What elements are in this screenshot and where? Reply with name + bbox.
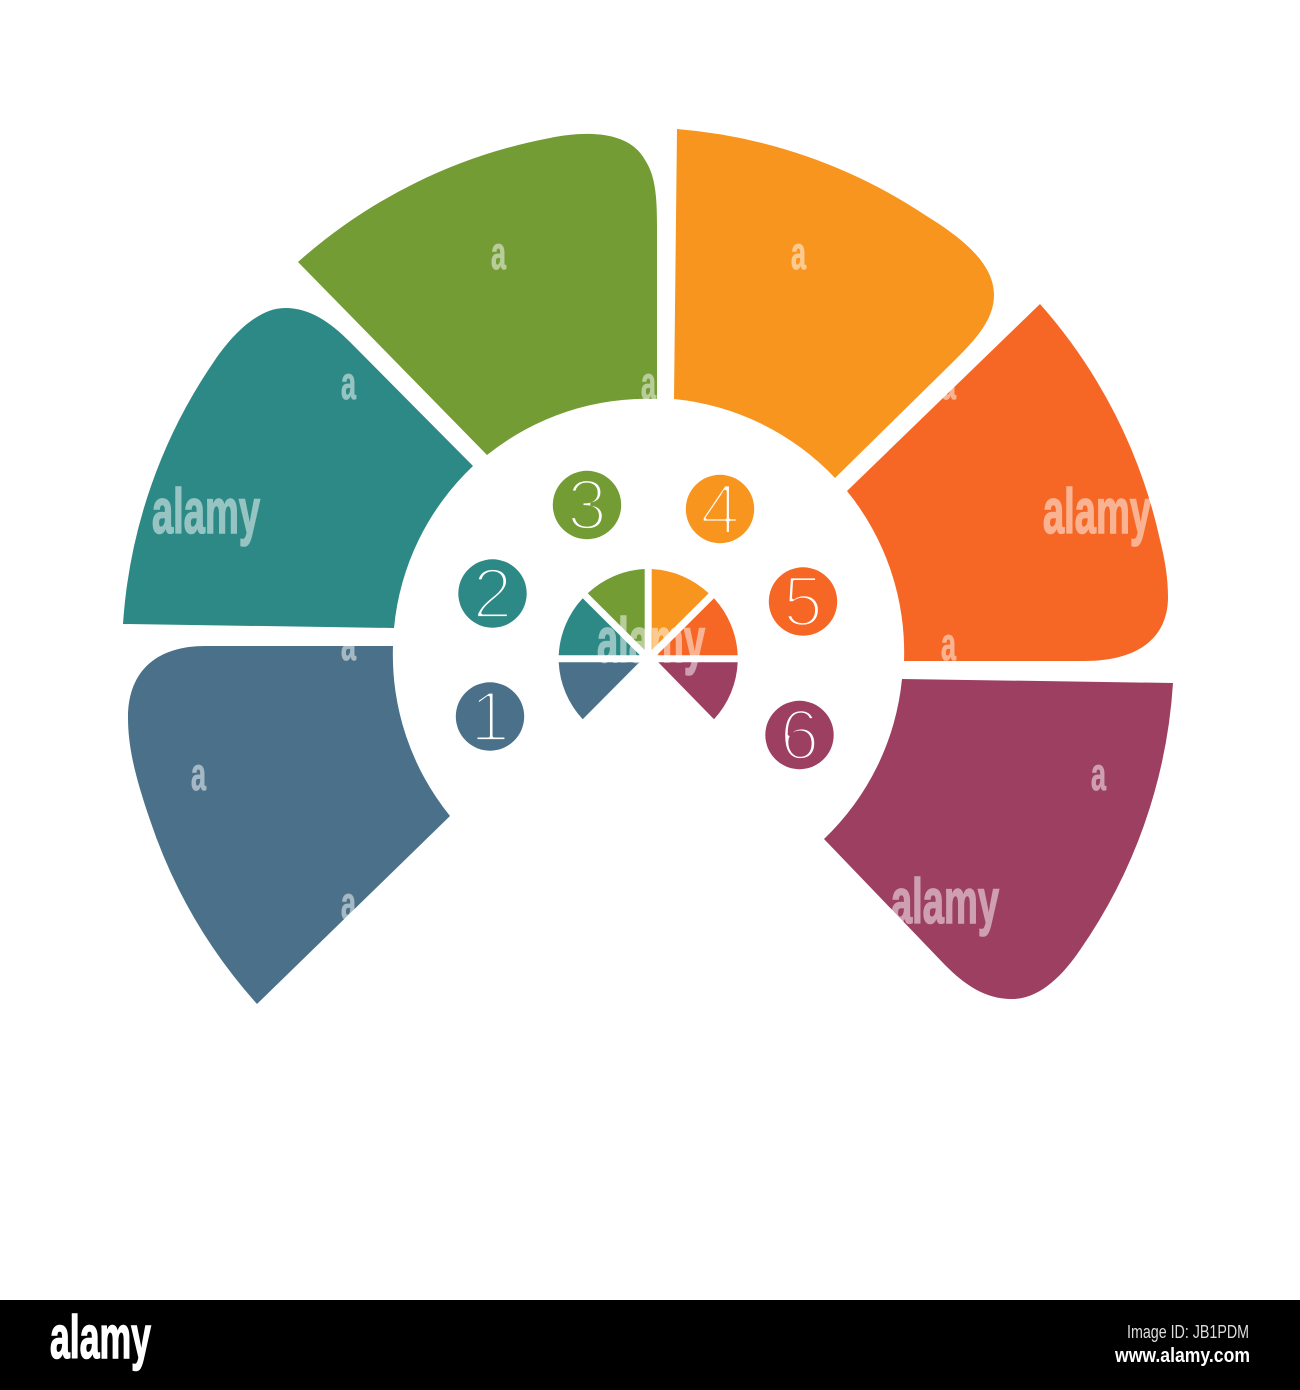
segment 3: green <box>298 134 657 455</box>
mini pie chart <box>559 569 738 719</box>
segment 1: blue <box>128 646 450 1004</box>
mini slice 6 <box>658 662 738 719</box>
watermarks: a <box>641 357 656 409</box>
watermarks: alamy <box>152 477 260 547</box>
website: www.alamy.com <box>1114 1345 1250 1367</box>
watermarks <box>152 227 1151 937</box>
number badge 4: 4 <box>700 470 740 550</box>
number badge 3 <box>553 466 621 546</box>
watermarks: a <box>941 357 956 409</box>
watermarks: a <box>341 618 356 670</box>
watermarks: a <box>491 227 506 279</box>
mini slice 1 <box>559 662 639 719</box>
watermarks: a <box>341 877 356 929</box>
mini slice 4 <box>652 569 709 650</box>
number badge 1 <box>456 678 524 757</box>
watermarks: a <box>941 618 956 670</box>
number badge 5 <box>769 563 837 642</box>
number badge 4 <box>686 470 754 550</box>
mini slice 2 <box>559 598 640 655</box>
watermarks: a <box>341 357 356 409</box>
watermarks: a <box>1091 748 1106 800</box>
segment 6: purple <box>824 679 1173 999</box>
footer logo: alamy <box>50 1304 151 1371</box>
watermarks: a <box>791 227 806 279</box>
watermarks: alamy <box>891 867 999 937</box>
number badge 6: 6 <box>780 696 819 776</box>
segment 4: orange <box>674 129 994 478</box>
image id: Image ID: JB1PDM <box>1127 1322 1249 1342</box>
number badge 2 <box>458 555 527 634</box>
number badge 5: 5 <box>783 563 823 642</box>
watermarks: alamy <box>597 606 705 676</box>
footer bar <box>0 1300 1300 1390</box>
number badge 3: 3 <box>567 466 607 546</box>
segment 2: teal <box>123 308 473 628</box>
number badge 2: 2 <box>473 555 512 634</box>
watermarks: a <box>191 748 206 800</box>
segment 5: red-orange <box>847 304 1168 661</box>
number badge 6 <box>765 696 834 776</box>
mini slice 3 <box>588 569 645 650</box>
mini slice 5 <box>657 598 738 655</box>
watermarks: alamy <box>1043 477 1151 547</box>
number badge 1: 1 <box>470 678 510 757</box>
